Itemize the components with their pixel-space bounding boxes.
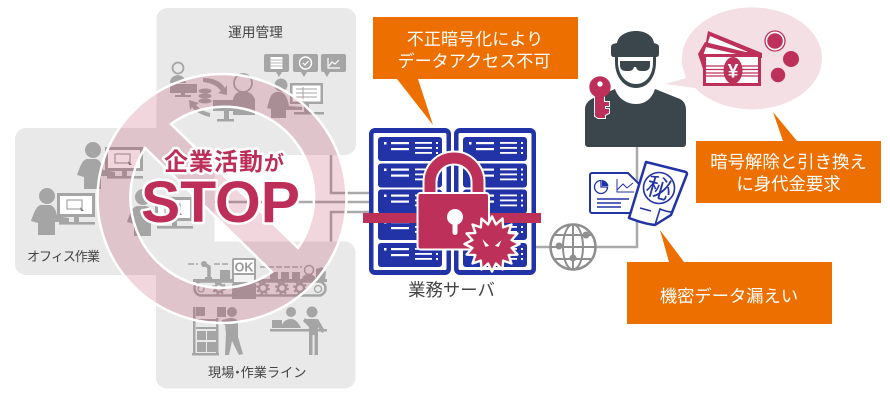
callout: confidential data leak: 機密データ漏えい <box>660 286 798 306</box>
icon: malware <box>464 216 520 272</box>
connector: server to attacker via internet <box>536 147 637 247</box>
icon: padlock <box>418 158 489 250</box>
icon: operator at terminal <box>267 78 324 118</box>
callout: unauthorized encryption: 不正暗号化により <box>407 30 543 49</box>
stop sign overlay <box>97 74 346 323</box>
callout: ransom demand <box>696 112 881 203</box>
icon: cashier and customer <box>270 306 327 355</box>
panel: field and production line <box>156 242 356 388</box>
icon: confidential documents <box>590 162 687 225</box>
panel: office work <box>15 128 214 275</box>
lock band <box>363 213 541 223</box>
icon: attacker <box>585 31 686 147</box>
icon: conveyor line: OK <box>235 260 253 274</box>
icon: confidential documents: 秘 <box>643 172 675 206</box>
icon: office workers at computers <box>31 142 193 236</box>
label: field and production line: 現場・作業ライン <box>208 365 306 380</box>
speech bubble: ransom <box>665 7 822 109</box>
heading: business activity stops: STOP <box>141 170 300 235</box>
panel: operations management <box>156 8 356 155</box>
icon: banknotes <box>698 31 762 86</box>
icon: conveyor line <box>188 258 327 299</box>
label: office work: オフィス作業 <box>27 249 100 264</box>
heading: business activity stops: 企業活動が <box>164 149 284 176</box>
callout: confidential data leak <box>627 230 832 324</box>
callout: ransom demand: 暗号解除と引き換え <box>710 152 867 172</box>
icon: banknotes: ¥ <box>728 62 739 82</box>
icon: business server <box>363 128 541 275</box>
icon: warehouse worker with shelf <box>192 307 243 356</box>
icon: decryption key <box>589 76 611 118</box>
icon: coins <box>765 31 799 82</box>
callout: ransom demand: に身代金要求 <box>736 174 841 194</box>
connector lines: work areas to server <box>210 150 370 245</box>
heading: operations management: 運用管理 <box>228 25 283 40</box>
callout: unauthorized encryption: データアクセス不可 <box>398 51 550 71</box>
label: business server: 業務サーバ <box>408 280 495 300</box>
icon: status speech bubbles <box>264 54 346 77</box>
icon: operator and data flow <box>170 62 255 122</box>
icon: internet globe <box>550 224 596 270</box>
callout: unauthorized encryption <box>373 17 578 125</box>
